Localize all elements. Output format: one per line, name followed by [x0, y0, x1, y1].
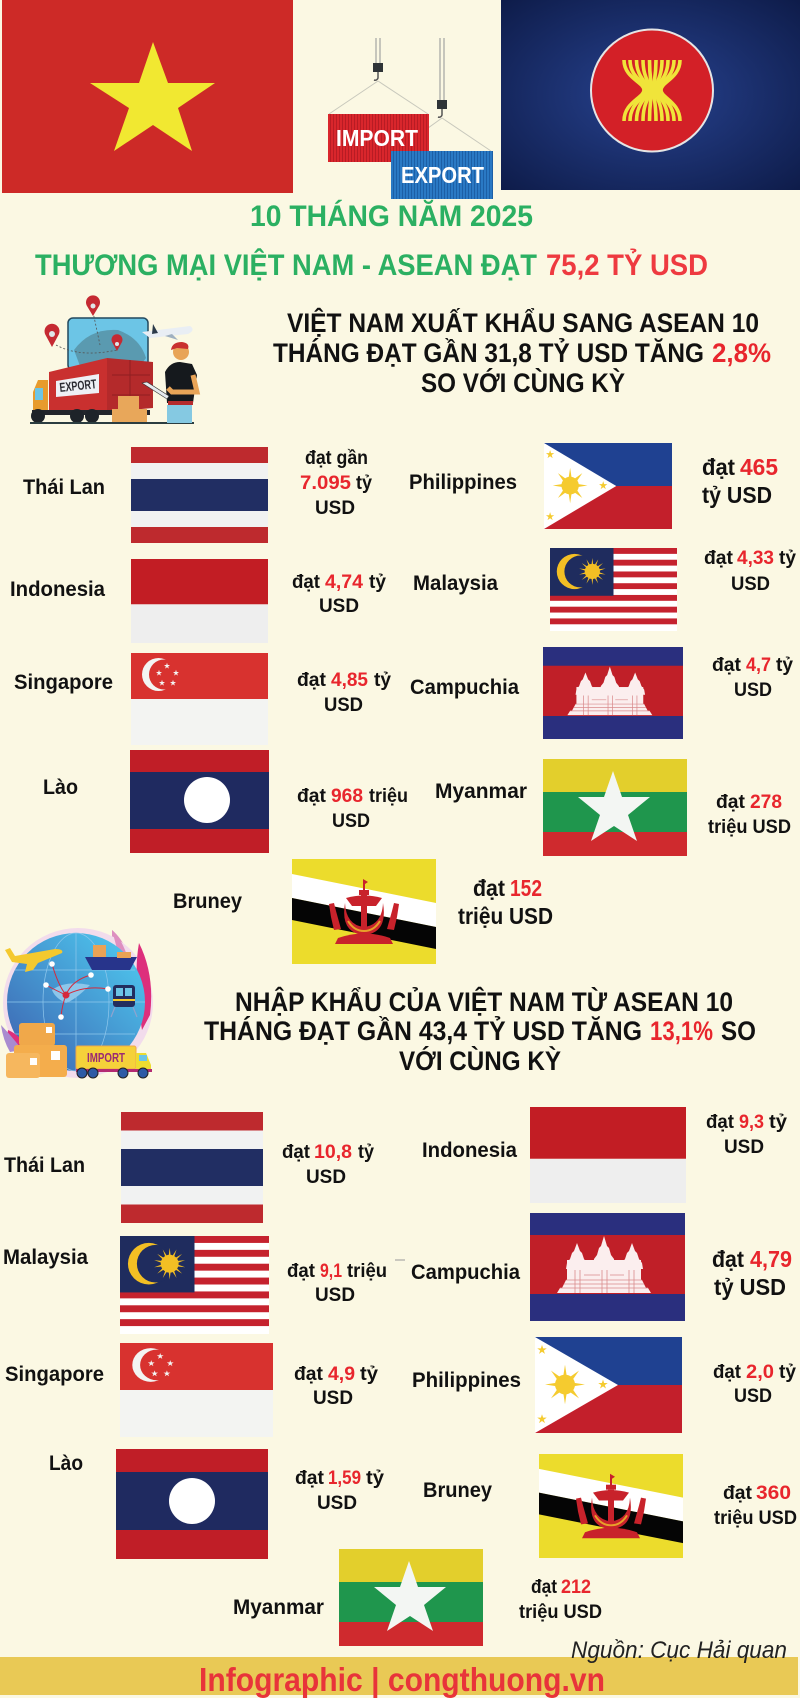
- import: Thái Lan value: đạt: [282, 1141, 310, 1163]
- icon: import export containers on cranes: IMPORT: [336, 125, 418, 151]
- import: Myanmar value: 212: [561, 1576, 591, 1598]
- export: Myanmar label: Myanmar: [435, 780, 527, 803]
- import: Myanmar label: Myanmar: [233, 1596, 324, 1619]
- export: Indonesia value: [292, 571, 386, 617]
- import: Malaysia value: USD: [315, 1284, 355, 1306]
- export: Myanmar value: [708, 791, 791, 838]
- export: Malaysia value: 4,33: [737, 547, 774, 569]
- import: Singapore value: 4,9: [328, 1363, 355, 1385]
- export: Campuchia value: USD: [734, 679, 772, 701]
- export: Thái Lan value: tỷ: [356, 472, 372, 494]
- import: Myanmar flag: [339, 1549, 483, 1646]
- export: Thái Lan value: [300, 447, 372, 519]
- import: Singapore value: [294, 1363, 378, 1409]
- import: Thái Lan value: tỷ: [358, 1141, 374, 1163]
- import: Indonesia label: Indonesia: [422, 1139, 517, 1162]
- export: Malaysia label: Malaysia: [413, 572, 498, 595]
- icon: import export containers on cranes: [328, 38, 493, 199]
- icon: import globe and truck: IMPORT: [87, 1050, 125, 1065]
- import: Lào value: [295, 1467, 384, 1514]
- export: Cambodia flag: [543, 647, 683, 739]
- export: Campuchia value: 4,7: [746, 654, 771, 676]
- import: Campuchia value: đạt: [712, 1246, 744, 1272]
- export: Singapore value: USD: [324, 694, 363, 716]
- icon: import export containers on cranes: EXPORT: [401, 162, 484, 188]
- export: Malaysia flag: [550, 548, 677, 631]
- export: Malaysia value: [704, 547, 796, 595]
- heading: import: [204, 985, 756, 1076]
- import: Bruney label: Bruney: [423, 1479, 492, 1502]
- export: Lào value: USD: [332, 810, 370, 832]
- import: Singapore value: đạt: [294, 1363, 324, 1385]
- import: Philippines value: [713, 1361, 796, 1407]
- export: Thái Lan value: USD: [315, 497, 355, 519]
- heading: export: [273, 307, 771, 398]
- title: period: 10 THÁNG NĂM 2025: [250, 199, 533, 233]
- flag: Vietnam: [2, 0, 293, 193]
- icon: import globe and truck: [1, 928, 153, 1078]
- export: Singapore value: [297, 669, 391, 716]
- export: Thái Lan value: đạt gần: [305, 447, 368, 469]
- export: Bruney label: Bruney: [173, 890, 242, 913]
- export: Bruney value: [458, 875, 553, 929]
- import: Thái Lan value: [282, 1141, 374, 1188]
- heading: export: 2,8%: [712, 338, 771, 368]
- import: Philippines value: 2,0: [746, 1361, 774, 1383]
- export: Singapore value: đạt: [297, 669, 327, 691]
- title: total trade: 75,2 TỶ USD: [546, 248, 708, 282]
- import: Indonesia value: USD: [724, 1136, 764, 1158]
- export: Lào value: [297, 785, 408, 832]
- import: Malaysia value: 9,1: [320, 1260, 342, 1282]
- export: Indonesia label: Indonesia: [10, 578, 105, 601]
- import: Lào label: Lào: [49, 1452, 83, 1475]
- import: Indonesia value: đạt: [706, 1111, 734, 1133]
- import: Brunei flag: [539, 1454, 683, 1558]
- export: Philippines value: đạt: [702, 454, 735, 480]
- import: Singapore flag: [120, 1343, 273, 1437]
- import: Bruney value: 360: [756, 1482, 791, 1504]
- export: Indonesia value: 4,74: [325, 571, 363, 593]
- import: Malaysia value: đạt: [287, 1260, 315, 1282]
- import: Philippines value: USD: [734, 1385, 772, 1407]
- export: Bruney value: triệu USD: [458, 903, 553, 929]
- heading: import: THÁNG ĐẠT GẦN 43,4 TỶ USD TĂNG: [204, 1014, 642, 1046]
- export: Lào value: triệu: [369, 785, 408, 807]
- footer bar: [0, 1657, 798, 1698]
- import: Lào value: tỷ: [366, 1467, 384, 1489]
- import: Malaysia value: triệu: [347, 1260, 387, 1282]
- export: Myanmar value: triệu USD: [708, 816, 791, 838]
- import: Malaysia value: [287, 1260, 387, 1306]
- footer bar: Infographic | congthuong.vn: [199, 1661, 605, 1698]
- export: Singapore value: tỷ: [374, 669, 391, 691]
- icon: export truck and worker: [30, 295, 197, 424]
- heading: export: SO VỚI CÙNG KỲ: [421, 367, 625, 398]
- import: Campuchia label: Campuchia: [411, 1261, 520, 1284]
- import: Bruney value: [714, 1482, 797, 1529]
- export: Brunei flag: [292, 859, 436, 964]
- heading: import: 13,1%: [650, 1016, 713, 1046]
- export: Malaysia value: tỷ: [779, 547, 796, 569]
- import: Cambodia flag: [530, 1213, 685, 1321]
- import: Malaysia label: Malaysia: [3, 1246, 88, 1269]
- export: Lào value: 968: [331, 785, 363, 807]
- export: Campuchia value: tỷ: [776, 654, 793, 676]
- heading: export: VIỆT NAM XUẤT KHẨU SANG ASEAN 10: [287, 307, 759, 338]
- import: Singapore label: Singapore: [5, 1363, 104, 1386]
- import: Lào value: USD: [317, 1492, 357, 1514]
- import: Philippines value: đạt: [713, 1361, 741, 1383]
- export: Philippines flag: [544, 443, 672, 529]
- import: Philippines flag: [535, 1337, 682, 1433]
- export: Philippines value: [702, 454, 778, 508]
- heading: import: NHẬP KHẨU CỦA VIỆT NAM TỪ ASEAN 10: [235, 985, 733, 1017]
- import: Campuchia value: 4,79: [750, 1246, 792, 1272]
- import: Thailand flag: [121, 1112, 263, 1223]
- export: Bruney value: đạt: [473, 875, 505, 901]
- export: Myanmar value: 278: [750, 791, 782, 813]
- import: Lào value: 1,59: [328, 1467, 361, 1489]
- import: Thái Lan value: 10,8: [314, 1141, 352, 1163]
- export: Thailand flag: [131, 447, 268, 543]
- export: Malaysia value: USD: [731, 573, 770, 595]
- export: Campuchia value: đạt: [712, 654, 742, 676]
- icon: export truck and worker: EXPORT: [59, 376, 97, 395]
- flag: ASEAN: [501, 0, 800, 190]
- export: Singapore flag: [131, 653, 268, 745]
- import: Campuchia value: [712, 1246, 792, 1300]
- export: Lào value: đạt: [297, 785, 327, 807]
- export: Indonesia value: đạt: [292, 571, 320, 593]
- import: Lào value: đạt: [295, 1467, 325, 1489]
- export: Campuchia label: Campuchia: [410, 676, 519, 699]
- export: Philippines label: Philippines: [409, 471, 517, 494]
- export: Philippines value: tỷ USD: [702, 482, 772, 508]
- export: Bruney value: 152: [510, 875, 542, 901]
- import: Myanmar value: đạt: [531, 1576, 557, 1598]
- import: Laos flag: [116, 1449, 268, 1559]
- title: total trade: THƯƠNG MẠI VIỆT NAM - ASEAN ĐẠT: [35, 248, 537, 282]
- export: Malaysia value: đạt: [704, 547, 734, 569]
- import: Thái Lan value: USD: [306, 1166, 346, 1188]
- export: Lào label: Lào: [43, 776, 78, 799]
- import: Bruney value: đạt: [723, 1482, 753, 1504]
- export: Campuchia value: [712, 654, 793, 701]
- import: Myanmar value: [519, 1576, 602, 1623]
- import: Indonesia value: tỷ: [769, 1111, 787, 1133]
- import: Indonesia flag: [530, 1107, 686, 1203]
- export: Thái Lan value: 7.095: [300, 472, 351, 494]
- import: Campuchia value: tỷ USD: [714, 1274, 786, 1300]
- import: Singapore value: USD: [313, 1387, 353, 1409]
- export: Philippines value: 465: [740, 454, 778, 480]
- heading: import: VỚI CÙNG KỲ: [399, 1045, 561, 1076]
- export: Laos flag: [130, 750, 269, 853]
- export: Myanmar value: đạt: [716, 791, 746, 813]
- export: Singapore value: 4,85: [331, 669, 368, 691]
- import: Malaysia flag: [120, 1236, 269, 1334]
- import: Indonesia value: 9,3: [739, 1111, 764, 1133]
- export: Singapore label: Singapore: [14, 671, 113, 694]
- export: Indonesia value: USD: [319, 595, 359, 617]
- import: Singapore value: tỷ: [360, 1363, 378, 1385]
- import: Thái Lan label: Thái Lan: [4, 1154, 85, 1177]
- export: Thái Lan label: Thái Lan: [23, 476, 105, 499]
- heading: import: SO: [721, 1016, 756, 1046]
- export: Indonesia value: tỷ: [369, 571, 386, 593]
- import: Philippines value: tỷ: [779, 1361, 796, 1383]
- heading: export: THÁNG ĐẠT GẦN 31,8 TỶ USD TĂNG: [273, 336, 704, 368]
- import: Indonesia value: [706, 1111, 787, 1158]
- import: Philippines label: Philippines: [412, 1369, 521, 1392]
- export: Myanmar flag: [543, 759, 687, 856]
- source note: Nguồn: Cục Hải quan: [571, 1637, 787, 1664]
- import: Myanmar value: triệu USD: [519, 1601, 602, 1623]
- export: Indonesia flag: [131, 559, 268, 643]
